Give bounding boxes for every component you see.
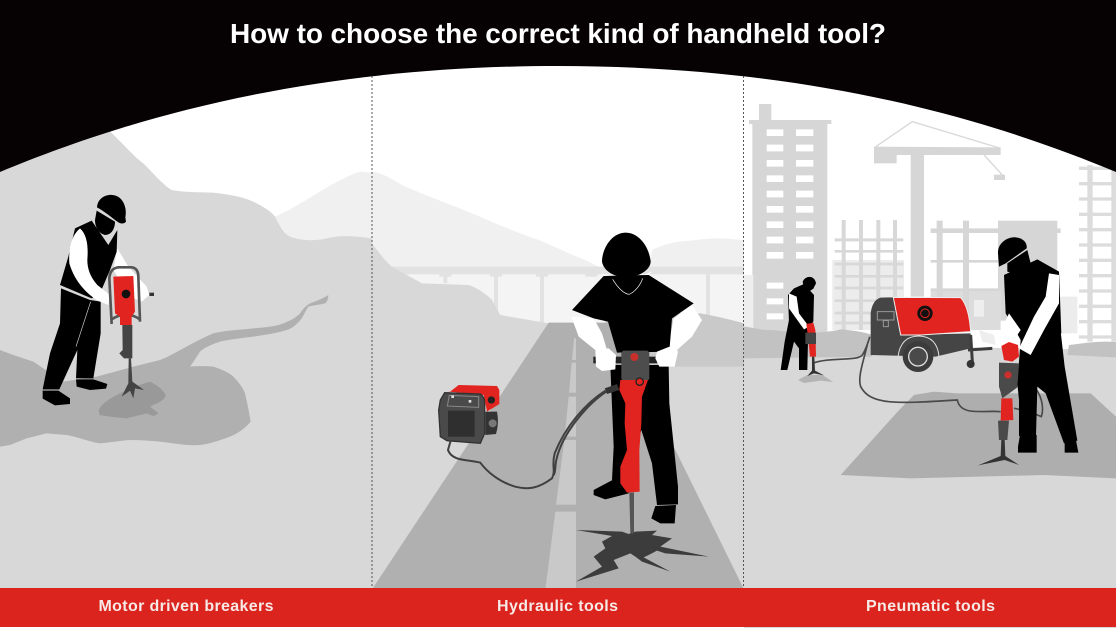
hydraulic power pack <box>439 385 499 443</box>
panel window <box>448 411 475 437</box>
boots <box>594 479 676 523</box>
breaker handle bar <box>593 357 657 363</box>
head <box>1007 250 1031 273</box>
background: frame building <box>931 221 1077 333</box>
back arm <box>1019 273 1059 355</box>
title: How to choose the correct kind of handheld tool? <box>230 18 886 49</box>
worker with hydraulic breaker <box>571 233 702 533</box>
distant ground bands <box>744 327 1116 358</box>
light distant mountain <box>275 172 372 253</box>
head <box>95 211 115 235</box>
air hoses <box>812 337 1043 417</box>
light distant mountains <box>372 172 744 270</box>
head and hat <box>803 277 816 292</box>
trousers <box>1017 332 1077 443</box>
chisel and cracks <box>122 358 144 398</box>
trousers <box>610 365 678 505</box>
background: scaffolding <box>832 220 904 330</box>
compressor red cover <box>893 297 971 335</box>
tow bar <box>968 335 992 362</box>
compressor panel outlines <box>877 312 894 327</box>
small breaker <box>806 323 816 357</box>
bridge <box>392 267 744 324</box>
wheel <box>903 341 933 372</box>
breaker red body <box>113 276 135 325</box>
concrete slab <box>841 392 1116 478</box>
red cover <box>444 385 499 412</box>
breaker head <box>621 351 649 381</box>
title band <box>0 0 1116 172</box>
breaker logo <box>122 290 130 298</box>
neck fringe <box>602 272 651 278</box>
wheel <box>485 412 498 435</box>
chisel <box>629 493 634 533</box>
boots <box>1018 435 1078 453</box>
road <box>372 323 744 589</box>
background: tall building <box>744 104 831 333</box>
head and hard hat <box>602 233 651 277</box>
handle end <box>149 293 154 296</box>
panel: hydraulic tools scene <box>372 172 744 589</box>
breaker shaft <box>119 325 132 358</box>
compressor <box>871 297 996 372</box>
worker with motor driven breaker <box>43 195 154 405</box>
bottom label bar <box>0 588 1116 627</box>
small chisel <box>807 357 824 376</box>
dark ground area and shadow <box>0 295 328 447</box>
compressor logo <box>917 306 933 321</box>
divider left <box>371 76 373 588</box>
panel: pneumatic tools scene <box>744 104 1116 628</box>
road centre line <box>545 338 576 589</box>
white arm <box>789 293 809 329</box>
panel: motor driven breakers scene <box>0 130 372 590</box>
trousers <box>43 288 101 389</box>
hard hat <box>97 195 126 224</box>
chin strap <box>613 278 643 294</box>
head logo <box>630 353 638 361</box>
t-shirt <box>572 275 694 353</box>
hard hat <box>998 237 1027 267</box>
jockey wheel <box>967 360 975 368</box>
label: pneumatic tools: Pneumatic tools <box>866 598 995 615</box>
crack in road <box>576 530 709 582</box>
hydraulic hoses <box>448 389 610 488</box>
front arm <box>998 313 1021 345</box>
ground and near mountain <box>0 130 372 590</box>
small puddle <box>798 375 833 383</box>
pneumatic breaker <box>978 342 1019 465</box>
trouser seam <box>76 302 91 347</box>
compressor body <box>871 297 971 357</box>
panel details <box>447 395 479 407</box>
background: crane <box>874 122 1005 297</box>
main worker <box>978 237 1078 465</box>
far arm <box>113 248 149 302</box>
legs <box>781 320 813 370</box>
small worker <box>781 277 824 376</box>
ground <box>744 343 1116 628</box>
vest <box>60 221 117 298</box>
puddle <box>99 382 166 418</box>
arms <box>571 305 702 350</box>
tow hitch light parts <box>979 330 996 345</box>
divider right <box>742 76 744 588</box>
label: hydraulic tools: Hydraulic tools <box>497 598 618 615</box>
breaker frame <box>109 267 140 324</box>
boots <box>43 379 107 405</box>
hose coupling <box>605 384 619 394</box>
background: right tower <box>1079 165 1116 342</box>
red breaker body <box>619 380 648 493</box>
hands <box>595 345 678 371</box>
right hill <box>605 313 744 370</box>
front panel <box>439 393 485 443</box>
wheel arch <box>898 336 939 357</box>
area beneath bridge <box>392 270 744 327</box>
label: motor driven breakers: Motor driven breakers <box>98 598 274 615</box>
vest <box>788 284 814 323</box>
vest <box>1004 259 1061 342</box>
left hill and ground <box>372 244 744 589</box>
near arm <box>69 228 110 305</box>
